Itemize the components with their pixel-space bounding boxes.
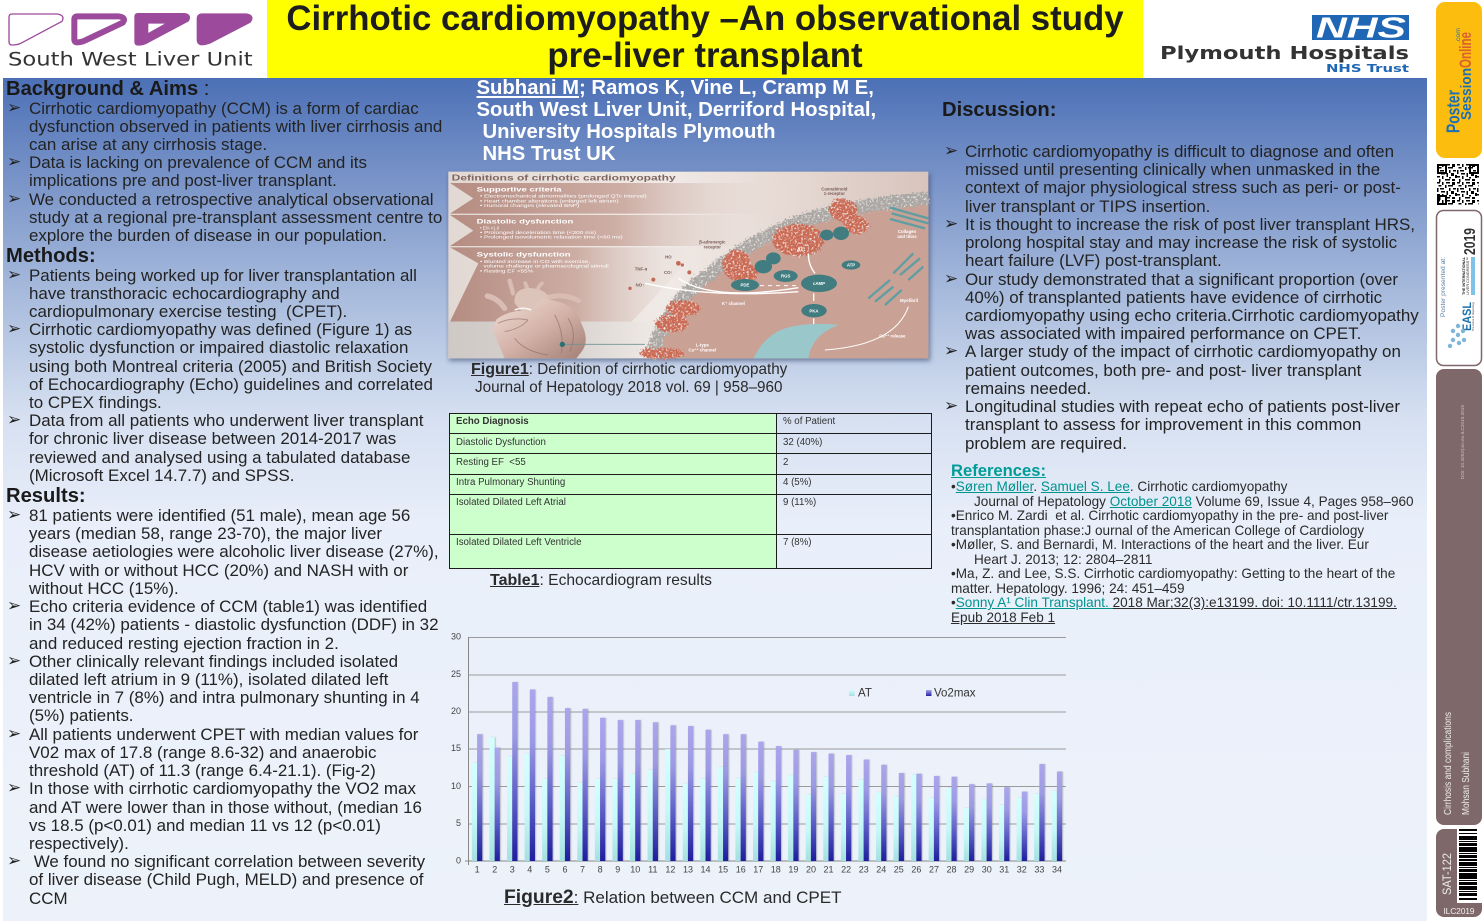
gridlines — [465, 637, 1066, 865]
x axis labels: 19 — [788, 864, 798, 874]
x axis labels: 1 — [475, 864, 480, 874]
labels: Cannabinoid — [821, 186, 848, 191]
bullet list: results: ➢ — [7, 596, 21, 616]
bullet list: discussion: ➢ — [944, 269, 958, 289]
y axis labels: 30 — [451, 632, 461, 642]
table: echocardiogram results: Intra Pulmonary Shunting — [456, 477, 565, 488]
bullet list: discussion — [944, 141, 1419, 452]
labels: β-adrenergic — [699, 240, 726, 245]
panel: background and aims — [6, 78, 442, 245]
x axis labels: 32 — [1017, 864, 1027, 874]
table: echocardiogram results: Diastolic Dysfunction — [456, 437, 546, 448]
bullet list: methods: to CPEX findings. — [29, 393, 162, 412]
logo: NHS Plymouth Hospitals: NHS Trust — [1326, 62, 1409, 75]
logo: NHS Plymouth Hospitals — [1160, 12, 1409, 75]
figure 1: definitions of cirrhotic cardiomyopathy diagram: volume challenge or pharmacological stimuli — [483, 264, 609, 269]
figure 1: definitions of cirrhotic cardiomyopathy diagram: • Blunted increase in CO with exercise, — [480, 259, 590, 264]
logo: NHS Plymouth Hospitals: NHS — [1316, 12, 1407, 44]
authors and affiliations: NHS Trust UK — [482, 142, 615, 164]
bullet list: results: in 34 (42%) patients - diastolic dysfunction (DDF) in 32 — [29, 615, 439, 634]
bullet list: results: disease aetiologies were alcoholic liver disease (27%), — [29, 542, 439, 561]
bullet list: results: 81 patients were identified (51 male), mean age 56 — [29, 506, 410, 525]
bullet list: discussion: Cirrhotic cardiomyopathy is difficult to diagnose and often — [965, 142, 1394, 161]
figure 1: definitions of cirrhotic cardiomyopathy diagram: • Resting EF <55% — [480, 268, 534, 273]
bullet list: results: without HCC (15%). — [29, 579, 179, 598]
x axis labels: 24 — [876, 864, 886, 874]
session details band: Mohsan Subhani — [1460, 752, 1472, 815]
bullet list: background: can arise at any cirrhosis stage. — [29, 135, 267, 154]
labels — [635, 186, 918, 352]
logo: South West Liver Unit: South West Liver Unit — [8, 49, 253, 70]
reference list: matter. Hepatology. 1996; 24: 451–459 — [951, 581, 1184, 596]
x axis labels: 2 — [492, 864, 497, 874]
bullet list: discussion: patient outcomes, both pre- and post- liver transplant — [965, 361, 1361, 380]
AT bars — [472, 737, 1057, 861]
labels: K⁺ channel — [722, 301, 745, 306]
Vo2max bars — [477, 682, 1062, 861]
caption: figure 1: Journal of Hepatology 2018 vol. 69 | 958–960 — [475, 378, 782, 396]
reference list: transplantation phase:J ournal of the American College of Cardiology — [951, 523, 1364, 538]
panel: methods — [6, 244, 433, 485]
heading: background and aims: Background & Aims : — [6, 78, 209, 100]
x axis labels: 9 — [615, 864, 620, 874]
authors and affiliations: Subhani M; Ramos K, Vine L, Cramp M E, — [476, 76, 874, 98]
bullet list: methods: of Echocardiography (Echo) guidelines and correlated — [29, 375, 433, 394]
figure 1: definitions of cirrhotic cardiomyopathy diagram: ATP — [847, 263, 855, 268]
caption: table 1: Table1: Echocardiogram results — [490, 572, 712, 588]
x axis labels: 14 — [700, 864, 711, 874]
x axis labels: 12 — [665, 864, 675, 874]
bullet list: discussion: missed until presenting clinically when unmasked in the — [965, 160, 1380, 179]
bullet list: methods — [7, 264, 433, 485]
bullet list: results: ➢ — [7, 778, 21, 798]
table: echocardiogram results: % of Patient — [783, 416, 835, 427]
bullet list: results: of liver disease (Child Pugh, MELD) and presence of — [29, 870, 423, 889]
table: echocardiogram results: Resting EF <55 — [456, 457, 526, 468]
x axis labels: 13 — [683, 864, 693, 874]
x axis labels: 5 — [545, 864, 550, 874]
x axis labels: 11 — [648, 864, 657, 874]
bullet list: results: ➢ — [7, 724, 21, 744]
bullet list: results: V02 max of 17.8 (range 8.6-32) and anaerobic — [29, 743, 376, 762]
PosterSessionOnline badge — [1436, 2, 1482, 158]
bullet list: results: (5%) patients. — [29, 706, 134, 725]
bullet list: discussion: remains needed. — [965, 379, 1091, 398]
reference list: •Søren Møller. Samuel S. Lee. Cirrhotic cardiomyopathy — [951, 479, 1287, 494]
PosterSessionOnline badge: Session — [1458, 68, 1475, 120]
x axis labels: 4 — [527, 864, 532, 874]
bullet list: discussion: heart failure (LVF) post-transplant. — [965, 251, 1222, 270]
bullet list: background: study at a regional pre-transplant assessment centre to — [29, 208, 442, 227]
x axis labels — [475, 864, 1062, 874]
y axis labels: 25 — [451, 669, 461, 679]
x axis labels: 10 — [630, 864, 640, 874]
x axis labels: 28 — [946, 864, 957, 874]
EASL congress badge: 2019 — [1462, 228, 1479, 255]
y axis labels — [451, 632, 461, 866]
bullet list: results: vs 18.5 (p<0.01) and median 11 vs 12 (p<0.01) — [29, 816, 381, 835]
table: echocardiogram results: 4 (5%) — [783, 477, 812, 488]
bullet list: results: and AT were lower than in those without, (median 16 — [29, 798, 422, 816]
bullet list: discussion: ➢ — [944, 214, 958, 234]
heading: discussion: Discussion: — [942, 99, 1056, 121]
arrows — [645, 253, 908, 350]
labels: TNF-α — [635, 266, 648, 271]
bullet list: results: ventricle in 7 (8%) and intra pulmonary shunting in 4 — [29, 688, 420, 707]
x axis labels: 21 — [823, 864, 834, 874]
figure 1: definitions of cirrhotic cardiomyopathy diagram: PKA — [809, 308, 819, 313]
heading: references: References: — [951, 461, 1046, 480]
figure 1: definitions of cirrhotic cardiomyopathy diagram: cAMP — [813, 281, 825, 286]
labels: and titins — [897, 234, 917, 239]
heading: methods: Methods: — [6, 244, 96, 266]
reference list: Journal of Hepatology October 2018 Volume 69, Issue 4, Pages 958–960 — [974, 494, 1414, 509]
bullet list: results: Echo criteria evidence of CCM (table1) was identified — [29, 597, 427, 616]
figure 1: definitions of cirrhotic cardiomyopathy diagram: • Prolonged deceleration time (<200 ms) — [480, 230, 597, 235]
bullet list: results: We found no significant correlation between severity — [34, 852, 425, 871]
caption: figure 1 — [471, 360, 788, 396]
bullet list: discussion: A larger study of the impact of cirrhotic cardiomyopathy on — [965, 342, 1401, 361]
EASL congress badge: Poster presented at: — [1440, 257, 1447, 317]
table: echocardiogram results: Echo Diagnosis — [456, 416, 529, 427]
authors and affiliations: South West Liver Unit, Derriford Hospital, — [476, 98, 876, 120]
figure 1: definitions of cirrhotic cardiomyopathy diagram: Definitions of cirrhotic cardiomyopathy — [452, 172, 676, 182]
x axis labels: 3 — [510, 864, 515, 874]
bullet list: discussion: context of major physiological stress such as peri- or post- — [965, 178, 1401, 197]
logo: NHS Plymouth Hospitals: Plymouth Hospitals — [1160, 43, 1409, 64]
bullet list: results: CCM — [29, 889, 68, 908]
heart — [487, 281, 586, 358]
bullet list: discussion: liver transplant or TIPS insertion. — [965, 197, 1210, 216]
bullet list: methods: ➢ — [7, 264, 21, 284]
reference list: •Sonny A¹ Clin Transplant. 2018 Mar;32(3):e13199. doi: 10.1111/ctr.13199. — [951, 595, 1397, 610]
table: echocardiogram results: 2 — [783, 457, 788, 468]
bullet list: discussion: was associated with impaired performance on CPET. — [965, 324, 1361, 343]
figure 1: definitions of cirrhotic cardiomyopathy diagram — [446, 172, 933, 364]
reference list: •Møller, S. and Bernardi, M. Interactions of the heart and the liver. Eur — [951, 537, 1369, 552]
labels: receptor — [704, 244, 721, 249]
figure 1: definitions of cirrhotic cardiomyopathy diagram: • Humoral changes (elevated BNP) — [480, 203, 580, 208]
bullet list: discussion: 40%) of transplanted patients have evidence of cirrhotic — [965, 288, 1382, 307]
table: echocardiogram results: Isolated Dilated Left Atrial — [456, 497, 566, 508]
bullet list: results: dilated left atrium in 9 (11%), isolated dilated left — [29, 670, 388, 689]
bullet list: methods: (Microsoft Excel 14.7.7) and SPSS. — [29, 466, 294, 485]
chart legend — [849, 688, 976, 700]
figure 1: definitions of cirrhotic cardiomyopathy diagram: • Electromechanical abnormalities (prolonged QTc interval) — [480, 194, 647, 199]
x axis labels: 8 — [598, 864, 603, 874]
bullet list: discussion: prolong hospital stay and may increase the risk of systolic — [965, 233, 1397, 252]
x axis labels: 30 — [982, 864, 992, 874]
bullet list: methods: Data from all patients who underwent liver transplant — [29, 411, 423, 430]
bullet list: discussion: ➢ — [944, 341, 958, 361]
labels: Ca⁺⁺ release — [879, 333, 906, 338]
figure 1: definitions of cirrhotic cardiomyopathy diagram: • Heart chamber alterations (enlarged left atrium) — [480, 198, 619, 203]
x axis labels: 20 — [806, 864, 816, 874]
x axis labels: 16 — [736, 864, 746, 874]
bullet list: background: We conducted a retrospective analytical observational — [29, 190, 434, 209]
x axis labels: 7 — [580, 864, 585, 874]
authors and affiliations — [476, 76, 876, 164]
title banner: Cirrhotic cardiomyopathy –An observational study — [286, 0, 1124, 38]
chart legend: AT — [858, 688, 872, 700]
logo: South West Liver Unit — [8, 13, 253, 70]
poster number and barcode: SAT-122 — [1440, 853, 1454, 895]
x axis labels: 25 — [894, 864, 904, 874]
bullet list: background: Cirrhotic cardiomyopathy (CCM) is a form of cardiac — [29, 98, 419, 118]
bullet list: methods: have transthoracic echocardiography and — [29, 284, 340, 303]
EASL congress badge: LIVER CONGRESS™ — [1466, 257, 1470, 295]
reference list: Epub 2018 Feb 1 — [951, 610, 1055, 625]
bullet list: discussion: ➢ — [944, 141, 958, 161]
bullet list: methods: using both Montreal criteria (2005) and British Society — [29, 357, 432, 376]
EASL congress badge: THE INTERNATIONAL — [1462, 256, 1466, 295]
bullet list: results: respectively). — [29, 834, 129, 853]
bullet list: background: explore the burden of disease in our population. — [29, 226, 387, 245]
bullet list: results: ➢ — [7, 505, 21, 525]
bullet list: results — [7, 505, 439, 908]
title banner: pre-liver transplant — [547, 36, 863, 75]
bullet list: methods: for chronic liver disease between 2014-2017 was — [29, 429, 396, 448]
x axis labels: 26 — [911, 864, 921, 874]
PosterSessionOnline badge: Online — [1456, 32, 1475, 68]
authors and affiliations: University Hospitals Plymouth — [482, 120, 776, 142]
bullet list: discussion: cardiomyopathy using echo criteria.Cirrhotic cardiomyopathy — [965, 306, 1419, 325]
table: echocardiogram results: 7 (8%) — [783, 537, 812, 548]
x axis labels: 15 — [718, 864, 728, 874]
panel: results — [6, 485, 439, 908]
y axis labels: 10 — [451, 781, 461, 791]
poster number and barcode — [1436, 829, 1482, 917]
bullet list: results: HCV with or without HCC (20%) and NASH with or — [29, 561, 408, 580]
figure 1: definitions of cirrhotic cardiomyopathy diagram: AC — [797, 248, 805, 254]
caption: figure 1: Figure1: Definition of cirrhotic cardiomyopathy — [471, 360, 787, 378]
EASL congress badge: The Home of Hepatology — [1471, 302, 1475, 331]
labels: NO↑ — [636, 283, 644, 288]
figure 1: definitions of cirrhotic cardiomyopathy diagram: Diastolic dysfunction — [477, 218, 573, 225]
bullet list: discussion: Longitudinal studies with repeat echo of patients post-liver — [965, 397, 1400, 416]
y axis labels: 5 — [456, 818, 461, 828]
bar chart: AT and Vo2max per patient — [451, 632, 1066, 874]
x axis labels: 33 — [1034, 864, 1044, 874]
bullet list: background: dysfunction observed in patients with liver cirrhosis and — [29, 117, 442, 136]
y axis labels: 20 — [451, 706, 461, 716]
reference list: •Ma, Z. and Lee, S.S. Cirrhotic cardiomyopathy: Getting to the heart of the — [951, 566, 1395, 581]
y axis labels: 0 — [456, 856, 461, 866]
labels: CO↑ — [664, 270, 673, 275]
labels: HO — [665, 254, 672, 259]
session details band: DOI: 10.3252/pso.eu.ILC2019.2019 — [1460, 405, 1466, 479]
reference list: Heart J. 2013; 12: 2804–2811 — [974, 552, 1152, 567]
session details band — [1436, 369, 1482, 825]
bullet list: methods: systolic dysfunction or impaired diastolic relaxation — [29, 338, 408, 357]
chart legend: Vo2max — [934, 688, 976, 700]
bullet list: background: ➢ — [7, 189, 21, 209]
bullet list: discussion: It is thought to increase the risk of post liver transplant HRS, — [965, 215, 1415, 234]
caption: figure 2: Figure2: Relation between CCM and CPET — [504, 886, 842, 908]
bullet list: methods: Patients being worked up for liver transplantation all — [29, 266, 417, 284]
bullet list: results: threshold (AT) of 11.3 (range 6.4-21.1). (Fig-2) — [29, 761, 376, 780]
table: echocardiogram results: 9 (11%) — [783, 497, 816, 508]
collagen and myofibril filaments — [868, 208, 928, 305]
x axis labels: 27 — [929, 864, 939, 874]
x axis labels: 18 — [771, 864, 781, 874]
bullet list: discussion: problem are required. — [965, 434, 1127, 452]
bullet list: methods: cardiopulmonary exercise testing (CPET). — [29, 302, 347, 321]
bullet list: background: Data is lacking on prevalence of CCM and its — [29, 153, 367, 172]
bullet list: discussion: ➢ — [944, 396, 958, 416]
bullet list: methods: reviewed and analysed using a tabulated database — [29, 448, 410, 467]
bullet list: background — [7, 98, 442, 245]
bullet list: methods: ➢ — [7, 410, 21, 430]
table: echocardiogram results — [449, 413, 932, 569]
bullet list: results: All patients underwent CPET with median values for — [29, 725, 418, 744]
figure 1: definitions of cirrhotic cardiomyopathy diagram: RGS — [781, 274, 790, 279]
session details band: Cirrhosis and complications — [1442, 712, 1454, 815]
figure 1: definitions of cirrhotic cardiomyopathy diagram: Supportive criteria — [477, 187, 562, 194]
cell membrane with receptors — [650, 198, 928, 358]
x axis labels: 22 — [841, 864, 851, 874]
PosterSessionOnline badge: .com — [1456, 28, 1462, 43]
table: echocardiogram results: 32 (40%) — [783, 437, 822, 448]
bullet list: results: ➢ — [7, 651, 21, 671]
EASL congress badge: EASL — [1460, 302, 1474, 331]
labels: 1-receptor — [824, 191, 845, 196]
x axis labels: 17 — [753, 864, 763, 874]
bullet list: background: ➢ — [7, 152, 21, 172]
bullet list: discussion: Our study demonstrated that a significant proportion (over — [965, 270, 1398, 289]
bullet list: methods: Cirrhotic cardiomyopathy was defined (Figure 1) as — [29, 320, 412, 339]
figure 1: definitions of cirrhotic cardiomyopathy diagram: Systolic dysfunction — [477, 251, 571, 258]
reference list: •Enrico M. Zardi et al. Cirrhotic cardiomyopathy in the pre- and post-liver — [951, 508, 1388, 523]
bullet list: discussion: transplant to assess for improvement in this common — [965, 415, 1361, 434]
sidebar: poster session strip — [1436, 2, 1482, 917]
bullet list: results: years (median 58, range 23-70), the major liver — [29, 524, 382, 543]
bullet list: background: implications pre and post-liver transplant. — [29, 171, 337, 190]
x axis labels: 23 — [859, 864, 869, 874]
pathway nodes — [731, 227, 860, 317]
bullet list: results: In those with cirrhotic cardiomyopathy the VO2 max — [29, 779, 416, 798]
x axis labels: 34 — [1052, 864, 1062, 874]
PosterSessionOnline badge: Poster — [1444, 90, 1464, 133]
x axis labels: 6 — [562, 864, 568, 874]
x axis labels: 31 — [999, 864, 1009, 874]
figure 1: definitions of cirrhotic cardiomyopathy diagram: • Prolonged isovolumetric relaxation time (<80 ms) — [480, 235, 623, 240]
sarcoplasmic reticulum — [753, 324, 838, 358]
x axis labels: 29 — [964, 864, 974, 874]
heading: results: Results: — [6, 485, 86, 507]
bullet list: background: ➢ — [7, 98, 21, 118]
bullet list: results: ➢ — [7, 851, 21, 871]
title banner — [267, 0, 1143, 78]
bullet list: methods: ➢ — [7, 319, 21, 339]
labels: Collagen — [898, 229, 916, 234]
poster number and barcode: ILC2019 — [1444, 906, 1475, 916]
labels: L-type — [696, 343, 709, 348]
QR code — [1437, 164, 1479, 205]
EASL congress badge — [1436, 210, 1482, 366]
labels: Myofibril — [900, 298, 918, 303]
bullet list: results: and reduced resting ejection fraction in 2. — [29, 634, 339, 653]
figure 1: definitions of cirrhotic cardiomyopathy diagram: PDE — [741, 283, 750, 288]
y axis labels: 15 — [451, 743, 461, 753]
reference list — [951, 479, 1414, 625]
figure 1: definitions of cirrhotic cardiomyopathy diagram: • E/A <1.0 — [480, 225, 500, 230]
labels: Ca⁺⁺ channel — [688, 347, 716, 352]
bullet list: results: Other clinically relevant findings included isolated — [29, 652, 398, 671]
table: echocardiogram results: Isolated Dilated Left Ventricle — [456, 537, 581, 548]
